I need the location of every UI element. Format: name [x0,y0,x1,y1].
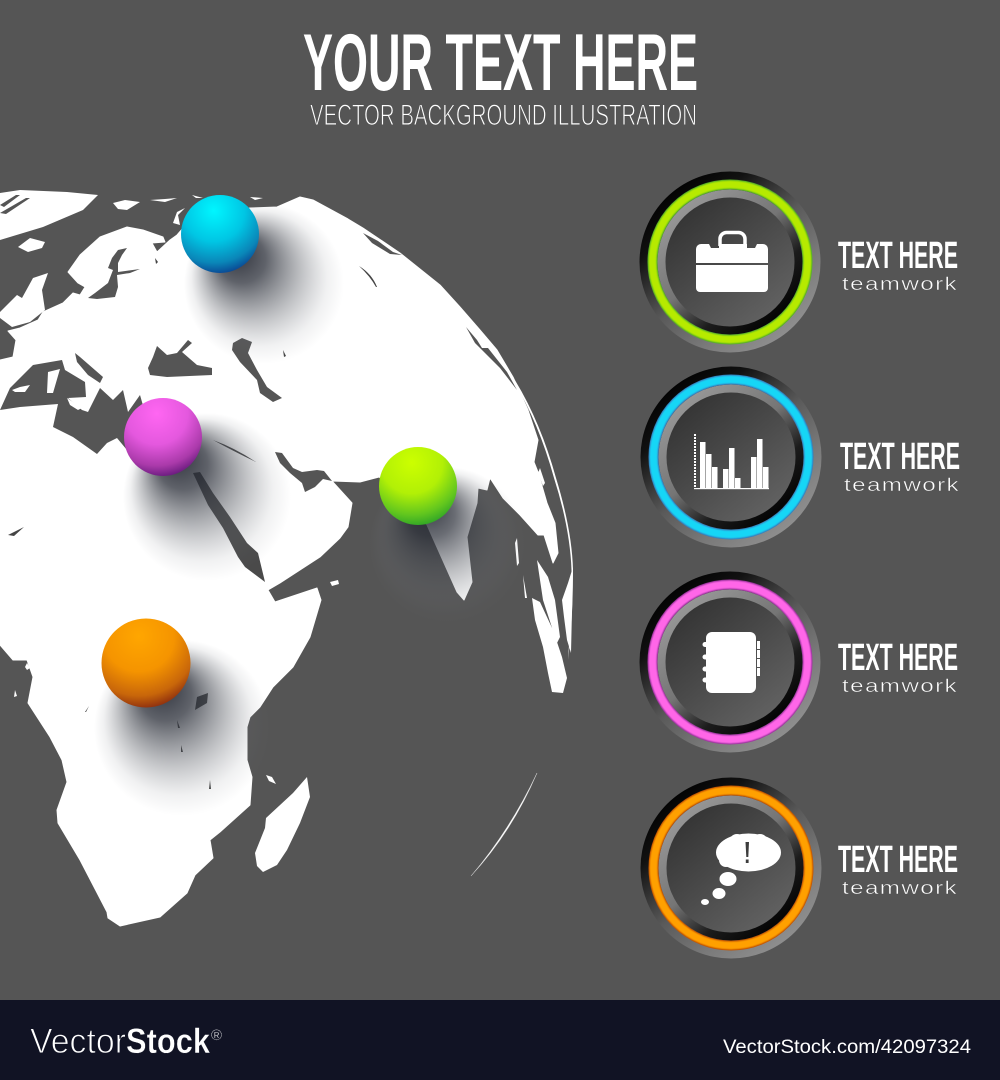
item 3 label: teamwork [842,676,958,696]
icon: briefcase [696,232,768,292]
world globe map [0,190,573,926]
item 3 label [838,637,958,696]
footer logo: Stock [126,1022,210,1061]
ball: green [379,447,457,525]
footer logo [30,1022,222,1061]
ball: cyan [181,195,259,273]
South-East Asia islands [515,468,573,693]
ball: orange [102,618,190,708]
ball shadows [94,204,525,816]
footer logo: Vector [30,1022,126,1061]
footer url: VectorStock.com/42097324 [723,1036,971,1058]
title: YOUR TEXT HERE [303,18,698,108]
thin rim arcs [511,377,573,660]
sea: Baltic [88,248,140,299]
item 1 label [838,235,958,294]
item 1: briefcase badge [640,172,820,352]
sea: Red Sea [193,472,265,582]
item 2 label [840,436,960,495]
item 2: bar chart badge [640,366,822,548]
footer bar [0,1000,1000,1080]
item 3: notebook badge [640,572,820,752]
item 4 label [838,839,958,898]
lakes and rivers [8,258,377,789]
footer logo: ® [211,1027,222,1044]
item 4: thought bubble badge [640,778,822,958]
land mass: Eurasia and Africa [0,197,558,926]
icon: thought bubble [701,834,781,905]
white islands [0,190,573,876]
Greenland ice streaks [0,195,30,214]
icon: notebook [702,632,760,693]
item 1 label: teamwork [842,274,958,294]
sea: Mediterranean [0,360,150,454]
sea: Caspian [232,338,282,402]
subtitle: VECTOR BACKGROUND ILLUSTRATION [310,99,697,132]
ball: magenta [124,398,202,476]
sea: Adriatic [75,353,103,383]
sea: Okhotsk wedge [466,327,517,390]
sea: Arctic wedge [363,233,402,255]
sea: Persian Gulf [275,452,332,492]
icon: bar chart [694,434,769,489]
item 4 label: teamwork [842,878,958,898]
sea: Black Sea [148,340,212,377]
item 2 label: teamwork [844,475,960,495]
